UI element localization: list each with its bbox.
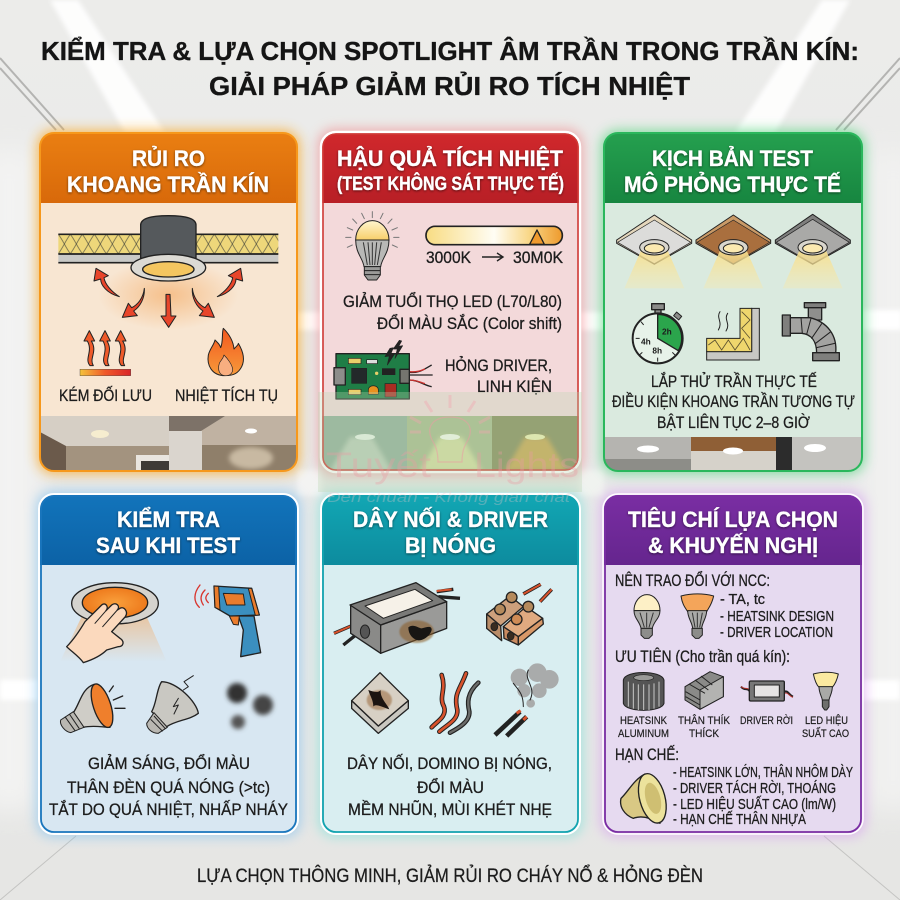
icon: stopwatch 2h 4h 8h: 8h xyxy=(652,346,662,356)
panel: rủi ro khoang trần kín xyxy=(37,130,300,474)
title xyxy=(41,36,859,101)
icon: infrared thermometer xyxy=(195,585,261,657)
icon: gold plastic lamp body xyxy=(621,771,671,826)
watermark: Tuyết Lights: Tuyết xyxy=(326,446,431,485)
heading line 1: TIÊU CHÍ LỰA CHỌN xyxy=(628,507,838,532)
icon: smoking cable xyxy=(495,663,559,736)
icon: hand touching hot downlight xyxy=(60,583,167,663)
heading line 1: RỦI RO xyxy=(132,146,205,171)
label: linh kiện: LINH KIỆN xyxy=(477,377,552,396)
arrow xyxy=(482,253,503,261)
text: dimming and color change: GIẢM SÁNG, ĐỔI MÀU xyxy=(88,754,250,773)
list: discussion items xyxy=(720,591,834,641)
text: install on real ceiling: LẮP THỬ TRẦN THỰC TẾ xyxy=(651,372,817,391)
heading line 2: SAU KHI TEST xyxy=(96,533,240,558)
icon: LED bulb with rays xyxy=(346,212,399,280)
list item: heatsink design: - HEATSINK DESIGN xyxy=(720,608,834,625)
heading line 1: DÂY NỐI & DRIVER xyxy=(353,506,548,532)
list item: avoid plastic: - HẠN CHẾ THÂN NHỰA xyxy=(673,811,806,828)
heading line 2: BỊ NÓNG xyxy=(405,533,496,558)
icon: elbow duct pipe xyxy=(782,303,839,361)
subheading: limitations: HẠN CHẾ: xyxy=(615,745,679,764)
label: thân thick xyxy=(678,714,731,740)
icon: burnt square connector xyxy=(352,673,408,733)
list: limitation items xyxy=(673,764,853,828)
icon: insulated ceiling corner xyxy=(707,308,759,360)
icon: dimmed reflector bulb xyxy=(60,681,125,733)
text: body too hot: THÂN ĐÈN QUÁ NÓNG (>tc) xyxy=(67,778,270,797)
heading line 1: KỊCH BẢN TEST xyxy=(652,146,813,171)
icon: flame xyxy=(208,328,243,376)
icon: high efficiency LED bulb xyxy=(813,672,838,710)
list item: TA, tc: - TA, tc xyxy=(720,591,765,608)
icon: thick finned body xyxy=(685,672,723,709)
list item: efficient LED: - LED HIỆU SUẤT CAO (lm/W) xyxy=(673,796,836,813)
text: reduced LED life: GIẢM TUỔI THỌ LED (L70/L80) xyxy=(343,292,562,311)
label line 2: ALUMINUM xyxy=(618,728,669,740)
label line 2: THÍCK xyxy=(689,727,720,740)
text: discolored: ĐỔI MÀU xyxy=(417,778,484,797)
label line 2: SUẤT CAO xyxy=(802,727,849,740)
heading line 1: HẬU QUẢ TÍCH NHIỆT xyxy=(337,146,563,171)
photo strip: ceiling rooms xyxy=(40,416,297,471)
heading xyxy=(96,507,240,558)
panel: dây nối và driver bị nóng xyxy=(318,491,583,837)
list item: separate driver: - DRIVER TÁCH RỜI, THOÁNG xyxy=(673,780,836,797)
watermark: Tuyết Lights xyxy=(318,392,582,506)
icon: warm LED bulb xyxy=(634,595,660,638)
icon: round aluminum heatsink xyxy=(623,672,664,710)
icon: stopwatch 2h 4h 8h: 4h xyxy=(641,336,651,346)
text: soft and burnt smell: MỀM NHŨN, MÙI KHÉT NHẸ xyxy=(348,800,552,819)
icon: flicker dots xyxy=(227,683,273,729)
icon: damaged circuit board xyxy=(334,340,433,399)
icon: plaster ceiling tile with light xyxy=(617,215,692,288)
icon: wood ceiling tile with light xyxy=(696,215,771,288)
text: on continuously 2-8 hours: BẬT LIÊN TỤC 2–8 GIỜ xyxy=(657,413,810,432)
heading line 2: KHOANG TRẦN KÍN xyxy=(67,172,269,197)
icon: concrete ceiling tile with light xyxy=(775,214,850,288)
subheading: discuss with supplier: NÊN TRAO ĐỔI VỚI NCC: xyxy=(615,571,770,590)
watermark: Tuyết Lights: Đèn chuẩn - Không gian chất xyxy=(327,489,571,506)
icon: discolored wires xyxy=(432,673,478,733)
label: 30M0K: 30M0K xyxy=(513,248,564,267)
heading xyxy=(67,146,269,197)
label: LED hiệu suất cao xyxy=(802,714,849,740)
icon: stopwatch 2h 4h 8h: 2h xyxy=(662,327,672,337)
text: thermal shutdown and flicker: TẮT DO QUÁ NHIỆT, NHẤP NHÁY xyxy=(49,800,288,819)
heading line 2: & KHUYẾN NGHỊ xyxy=(648,533,818,558)
label line 1: LED HIỆU xyxy=(805,714,848,727)
icon: separate driver xyxy=(741,681,793,701)
panel: hậu quả tích nhiệt xyxy=(318,129,583,475)
title line 2: GIẢI PHÁP GIẢM RỦI RO TÍCH NHIỆT xyxy=(209,70,690,101)
heading line 2: MÔ PHỎNG THỰC TẾ xyxy=(624,172,841,197)
list item: driver location: - DRIVER LOCATION xyxy=(720,624,833,641)
icon: domino terminal block xyxy=(487,584,552,645)
label: kém đối lưu: KÉM ĐỐI LƯU xyxy=(59,385,152,405)
panel: kịch bản test xyxy=(601,130,865,474)
panel: kiểm tra sau khi test xyxy=(36,491,301,837)
panel: tiêu chí lựa chọn và khuyến nghị xyxy=(600,491,866,837)
subheading: priorities: ƯU TIÊN (Cho trần quá kín): xyxy=(615,647,790,666)
heading xyxy=(624,146,841,197)
label: driver rời: DRIVER RỜI xyxy=(740,714,793,727)
label: 3000K: 3000K xyxy=(426,248,472,267)
label line 1: THÂN THÍK xyxy=(678,714,731,727)
icon: burnt driver box xyxy=(334,583,460,653)
label line 1: HEATSINK xyxy=(620,715,668,727)
icon: stopwatch 2h 4h 8h xyxy=(633,304,683,363)
text: wires and domino hot: DÂY NỐI, DOMINO BỊ NÓNG, xyxy=(347,753,552,773)
diagram: recessed light in insulated ceiling with heat arrows xyxy=(58,216,278,330)
icon: orange reflector LED bulb xyxy=(681,594,714,638)
heading line 2: (TEST KHÔNG SÁT THỰC TẾ) xyxy=(337,173,564,195)
photo strip: real ceilings xyxy=(604,437,862,471)
color temperature bar xyxy=(426,226,562,245)
heading xyxy=(628,507,838,558)
watermark: Tuyết Lights: Lights xyxy=(474,446,579,485)
label: heatsink aluminum xyxy=(618,715,669,740)
icon: cracked reflector bulb xyxy=(147,676,198,733)
heading xyxy=(353,506,548,558)
text: color shift: ĐỔI MÀU SẮC (Color shift) xyxy=(377,314,562,333)
heading line 1: KIỂM TRA xyxy=(117,507,220,532)
footer tagline: LỰA CHỌN THÔNG MINH, GIẢM RỦI RO CHÁY NỔ & HỎNG ĐÈN xyxy=(197,865,703,887)
label: nhiệt tích tụ: NHIỆT TÍCH TỤ xyxy=(175,386,278,405)
title line 1: KIỂM TRA & LỰA CHỌN SPOTLIGHT ÂM TRẦN TRONG TRẦN KÍN: xyxy=(41,36,859,66)
label: hỏng driver: HỎNG DRIVER, xyxy=(445,356,552,375)
photo strip: tinted downlights xyxy=(322,416,579,471)
heading xyxy=(337,146,564,195)
icon: weak convection xyxy=(80,331,131,376)
